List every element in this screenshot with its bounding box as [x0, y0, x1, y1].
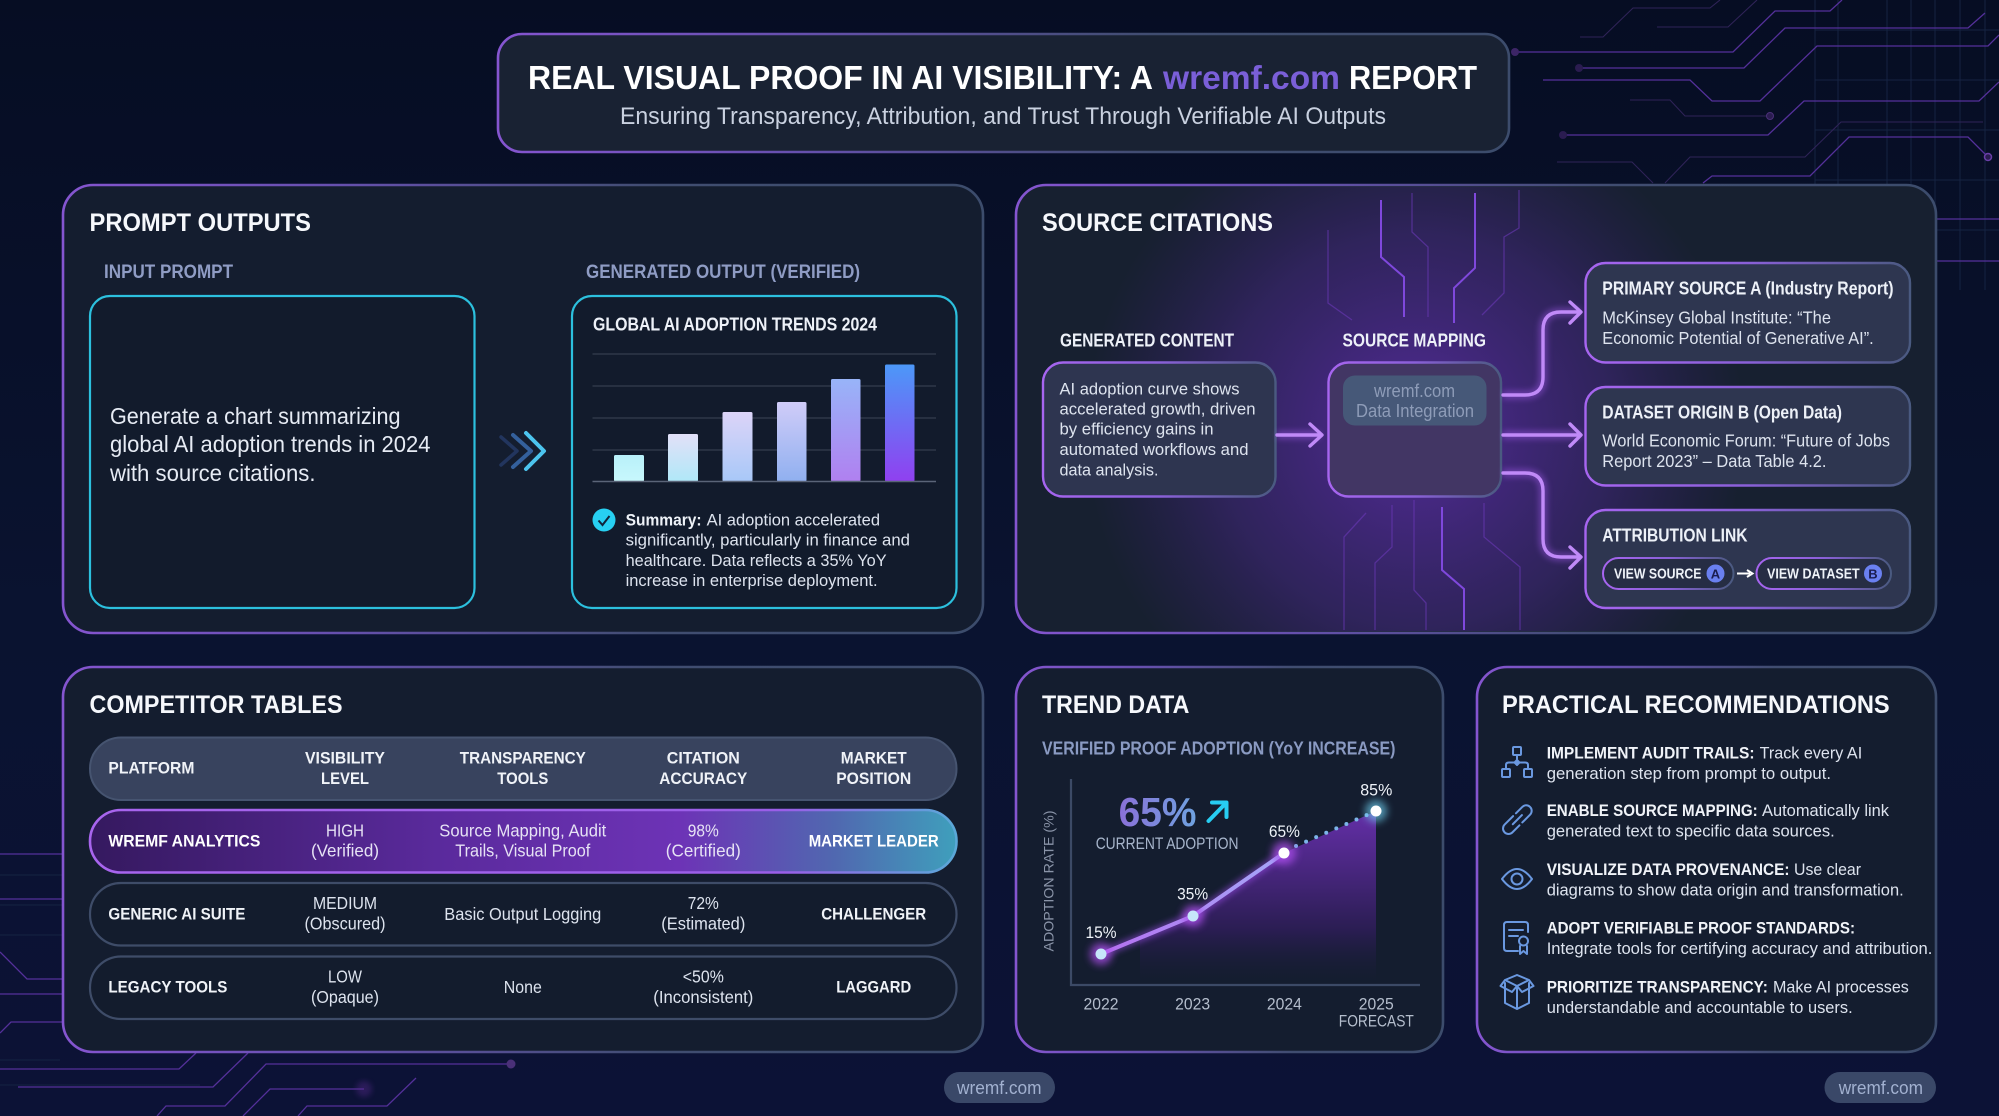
heading: competitor tables: COMPETITOR TABLES — [90, 691, 342, 719]
table row: wremf analytics — [90, 810, 956, 872]
table row: wremf analytics: Source Mapping, Audit — [439, 820, 606, 840]
heading: practical recommendations: PRACTICAL RECOMMENDATIONS — [1502, 691, 1890, 719]
button: view source — [1603, 558, 1734, 589]
source card B: DATASET ORIGIN B (Open Data) — [1602, 402, 1842, 422]
table row: wremf analytics: HIGH — [326, 820, 364, 840]
panel: practical recommendations — [1477, 667, 1936, 1052]
table header row — [90, 738, 956, 800]
attribution link card: ATTRIBUTION LINK — [1602, 526, 1748, 546]
table row: generic ai suite: 72% — [688, 893, 719, 913]
recommendation: transparency: understandable and accountable to users. — [1547, 998, 1853, 1017]
recommendation: transparency — [1500, 975, 1909, 1017]
table header row: POSITION — [836, 769, 911, 788]
icon: hierarchy — [1502, 747, 1532, 777]
data points — [1090, 800, 1387, 965]
icon: open box — [1500, 975, 1534, 1009]
table row: wremf analytics: MARKET LEADER — [809, 832, 939, 850]
source mapping box: wremf.com — [1373, 381, 1455, 401]
title: REPORT — [1349, 59, 1477, 96]
icon: eye — [1502, 869, 1532, 889]
button: view source: VIEW SOURCE — [1614, 566, 1702, 582]
generated content box: AI adoption curve shows — [1060, 380, 1240, 398]
source card A: Economic Potential of Generative AI”. — [1602, 328, 1874, 348]
heading: trend data: TREND DATA — [1042, 691, 1189, 719]
summary text: increase in enterprise deployment. — [626, 571, 878, 590]
recommendation: proof standards: ADOPT VERIFIABLE PROOF STANDARDS: — [1547, 918, 1855, 938]
table row: generic ai suite: (Estimated) — [661, 914, 745, 934]
table header row: VISIBILITY — [305, 748, 386, 768]
panel: source citations — [1016, 185, 1936, 633]
table row: wremf analytics: 98% — [688, 820, 719, 840]
source card B: Report 2023” – Data Table 4.2. — [1602, 451, 1826, 471]
table row: generic ai suite: Basic Output Logging — [444, 904, 601, 924]
table row: generic ai suite — [90, 883, 956, 946]
recommendation: audit trails: IMPLEMENT AUDIT TRAILS: — [1547, 744, 1754, 762]
icon: certificate — [1504, 922, 1528, 954]
panel: competitor tables — [63, 667, 983, 1052]
recommendation: data provenance — [1502, 860, 1904, 900]
table row: wremf analytics: Trails, Visual Proof — [455, 840, 590, 860]
table row: wremf analytics: (Certified) — [666, 840, 741, 860]
x axis labels: 2023 — [1175, 994, 1210, 1014]
callout: current adoption: 65% — [1119, 789, 1196, 835]
heading: prompt outputs: PROMPT OUTPUTS — [90, 209, 311, 237]
panel: prompt outputs — [63, 185, 983, 633]
axes — [1071, 779, 1420, 985]
generated content box: automated workflows and — [1060, 440, 1248, 459]
table row: legacy tools: LEGACY TOOLS — [108, 978, 227, 996]
summary text: AI adoption accelerated — [707, 510, 880, 530]
heading: source citations: SOURCE CITATIONS — [1042, 209, 1273, 237]
arrows: connectors glow — [1277, 312, 1580, 557]
callout: current adoption: CURRENT ADOPTION — [1096, 835, 1238, 853]
bar chart — [592, 354, 936, 482]
generated content box: accelerated growth, driven — [1060, 400, 1256, 418]
summary text — [626, 510, 910, 590]
table header row: TOOLS — [497, 769, 548, 788]
title: REAL VISUAL PROOF IN AI VISIBILITY: A — [528, 59, 1153, 96]
source card B — [1586, 387, 1910, 486]
recommendation: audit trails: generation step from prompt to output. — [1547, 764, 1831, 783]
recommendation: data provenance: diagrams to show data origin and transformation. — [1547, 880, 1904, 900]
table row: legacy tools: None — [504, 977, 542, 997]
recommendation: source mapping: ENABLE SOURCE MAPPING: — [1547, 801, 1758, 820]
table row: wremf analytics: WREMF ANALYTICS — [108, 832, 260, 850]
recommendation: proof standards — [1504, 918, 1932, 958]
title banner — [498, 34, 1509, 152]
footer badge: right: wremf.com — [1838, 1078, 1923, 1098]
recommendation: proof standards: Integrate tools for certifying accuracy and attribution. — [1547, 939, 1932, 958]
area — [1140, 811, 1376, 982]
label: source mapping: SOURCE MAPPING — [1342, 330, 1486, 350]
source card A — [1586, 263, 1910, 362]
value labels — [1086, 780, 1392, 942]
table header row: LEVEL — [321, 769, 369, 788]
recommendation: transparency: Make AI processes — [1773, 978, 1909, 996]
value labels: 35% — [1177, 884, 1208, 904]
axis label: ADOPTION RATE (%) — [1040, 810, 1056, 952]
generated content box: by efficiency gains in — [1060, 420, 1214, 438]
summary text: healthcare. Data reflects a 35% YoY — [626, 551, 887, 570]
input prompt box: global AI adoption trends in 2024 — [110, 431, 431, 457]
table row: generic ai suite: (Obscured) — [304, 914, 386, 934]
table row: legacy tools: LOW — [328, 966, 362, 986]
callout: current adoption — [1096, 789, 1238, 853]
input prompt box: with source citations. — [109, 460, 316, 486]
summary text: Summary: — [626, 510, 702, 530]
source card A: McKinsey Global Institute: “The — [1602, 308, 1831, 328]
table row: legacy tools: LAGGARD — [836, 978, 911, 996]
source mapping box — [1328, 362, 1501, 496]
source mapping box: Data Integration — [1356, 401, 1474, 421]
panel: trend data — [1016, 667, 1443, 1052]
icon: check — [592, 508, 616, 532]
arrow: source to dataset — [1737, 570, 1752, 577]
glow and inner circuits — [1018, 187, 1934, 631]
arrows: connectors — [1277, 302, 1581, 568]
recommendation: audit trails: Track every AI — [1760, 744, 1862, 762]
source card B: World Economic Forum: “Future of Jobs — [1602, 430, 1890, 450]
button: view dataset: VIEW DATASET — [1767, 566, 1860, 582]
footer badge: center — [944, 1072, 1055, 1103]
x axis labels: 2024 — [1267, 994, 1302, 1014]
button: view dataset: B — [1868, 566, 1878, 582]
table header row: PLATFORM — [108, 758, 194, 778]
x axis labels: 2025 — [1359, 994, 1394, 1014]
input prompt box — [90, 296, 474, 608]
input prompt box: Generate a chart summarizing — [110, 403, 400, 429]
value labels: 85% — [1360, 780, 1392, 800]
label: input prompt: INPUT PROMPT — [104, 262, 233, 283]
recommendation: source mapping — [1501, 801, 1889, 840]
table row: legacy tools: (Opaque) — [311, 987, 379, 1007]
arrow: chevrons — [501, 433, 544, 469]
table row: legacy tools: <50% — [683, 966, 724, 986]
table header row: CITATION — [667, 748, 740, 768]
table header row: MARKET — [841, 748, 907, 768]
recommendation: source mapping: Automatically link — [1762, 801, 1889, 820]
footer badge: center: wremf.com — [956, 1078, 1042, 1098]
button: view dataset — [1756, 558, 1891, 589]
value labels: 15% — [1086, 923, 1116, 942]
subtitle: Ensuring Transparency, Attribution, and Trust Through Verifiable AI Outputs — [620, 103, 1386, 130]
icon: link — [1501, 803, 1534, 836]
table row: generic ai suite: MEDIUM — [313, 893, 377, 913]
table header row: ACCURACY — [659, 769, 748, 788]
x axis labels: FORECAST — [1339, 1012, 1414, 1030]
table row: generic ai suite: CHALLENGER — [821, 904, 926, 924]
table row: legacy tools — [90, 956, 956, 1019]
title: wremf.com — [1162, 59, 1340, 96]
generated content box: data analysis. — [1060, 460, 1158, 480]
trend line — [1101, 811, 1376, 954]
table header row: TRANSPARENCY — [460, 748, 586, 768]
label: generated output: GENERATED OUTPUT (VERIFIED) — [586, 262, 860, 283]
recommendation: source mapping: generated text to specific data sources. — [1547, 822, 1835, 840]
source card A: PRIMARY SOURCE A (Industry Report) — [1602, 278, 1894, 298]
table row: wremf analytics: (Verified) — [311, 840, 379, 860]
recommendation: audit trails — [1502, 744, 1862, 783]
recommendation: transparency: PRIORITIZE TRANSPARENCY: — [1547, 978, 1768, 996]
generated content box — [1043, 362, 1276, 496]
subheading: VERIFIED PROOF ADOPTION (YoY INCREASE) — [1042, 738, 1395, 758]
line chart — [1040, 779, 1420, 1030]
value labels: 65% — [1269, 822, 1300, 841]
button: view source: A — [1711, 566, 1721, 582]
attribution link card — [1586, 510, 1910, 608]
summary text: significantly, particularly in finance and — [626, 530, 910, 550]
chart title: GLOBAL AI ADOPTION TRENDS 2024 — [593, 314, 877, 334]
table row: generic ai suite: GENERIC AI SUITE — [108, 904, 245, 924]
title — [528, 59, 1477, 96]
recommendation: data provenance: VISUALIZE DATA PROVENANCE: — [1547, 860, 1790, 879]
footer badge: right — [1824, 1072, 1936, 1103]
recommendation: data provenance: Use clear — [1794, 860, 1861, 879]
x axis labels — [1084, 994, 1414, 1030]
table row: legacy tools: (Inconsistent) — [653, 987, 753, 1007]
generated output box — [572, 296, 956, 608]
x axis labels: 2022 — [1084, 994, 1118, 1014]
label: generated content: GENERATED CONTENT — [1060, 330, 1234, 350]
